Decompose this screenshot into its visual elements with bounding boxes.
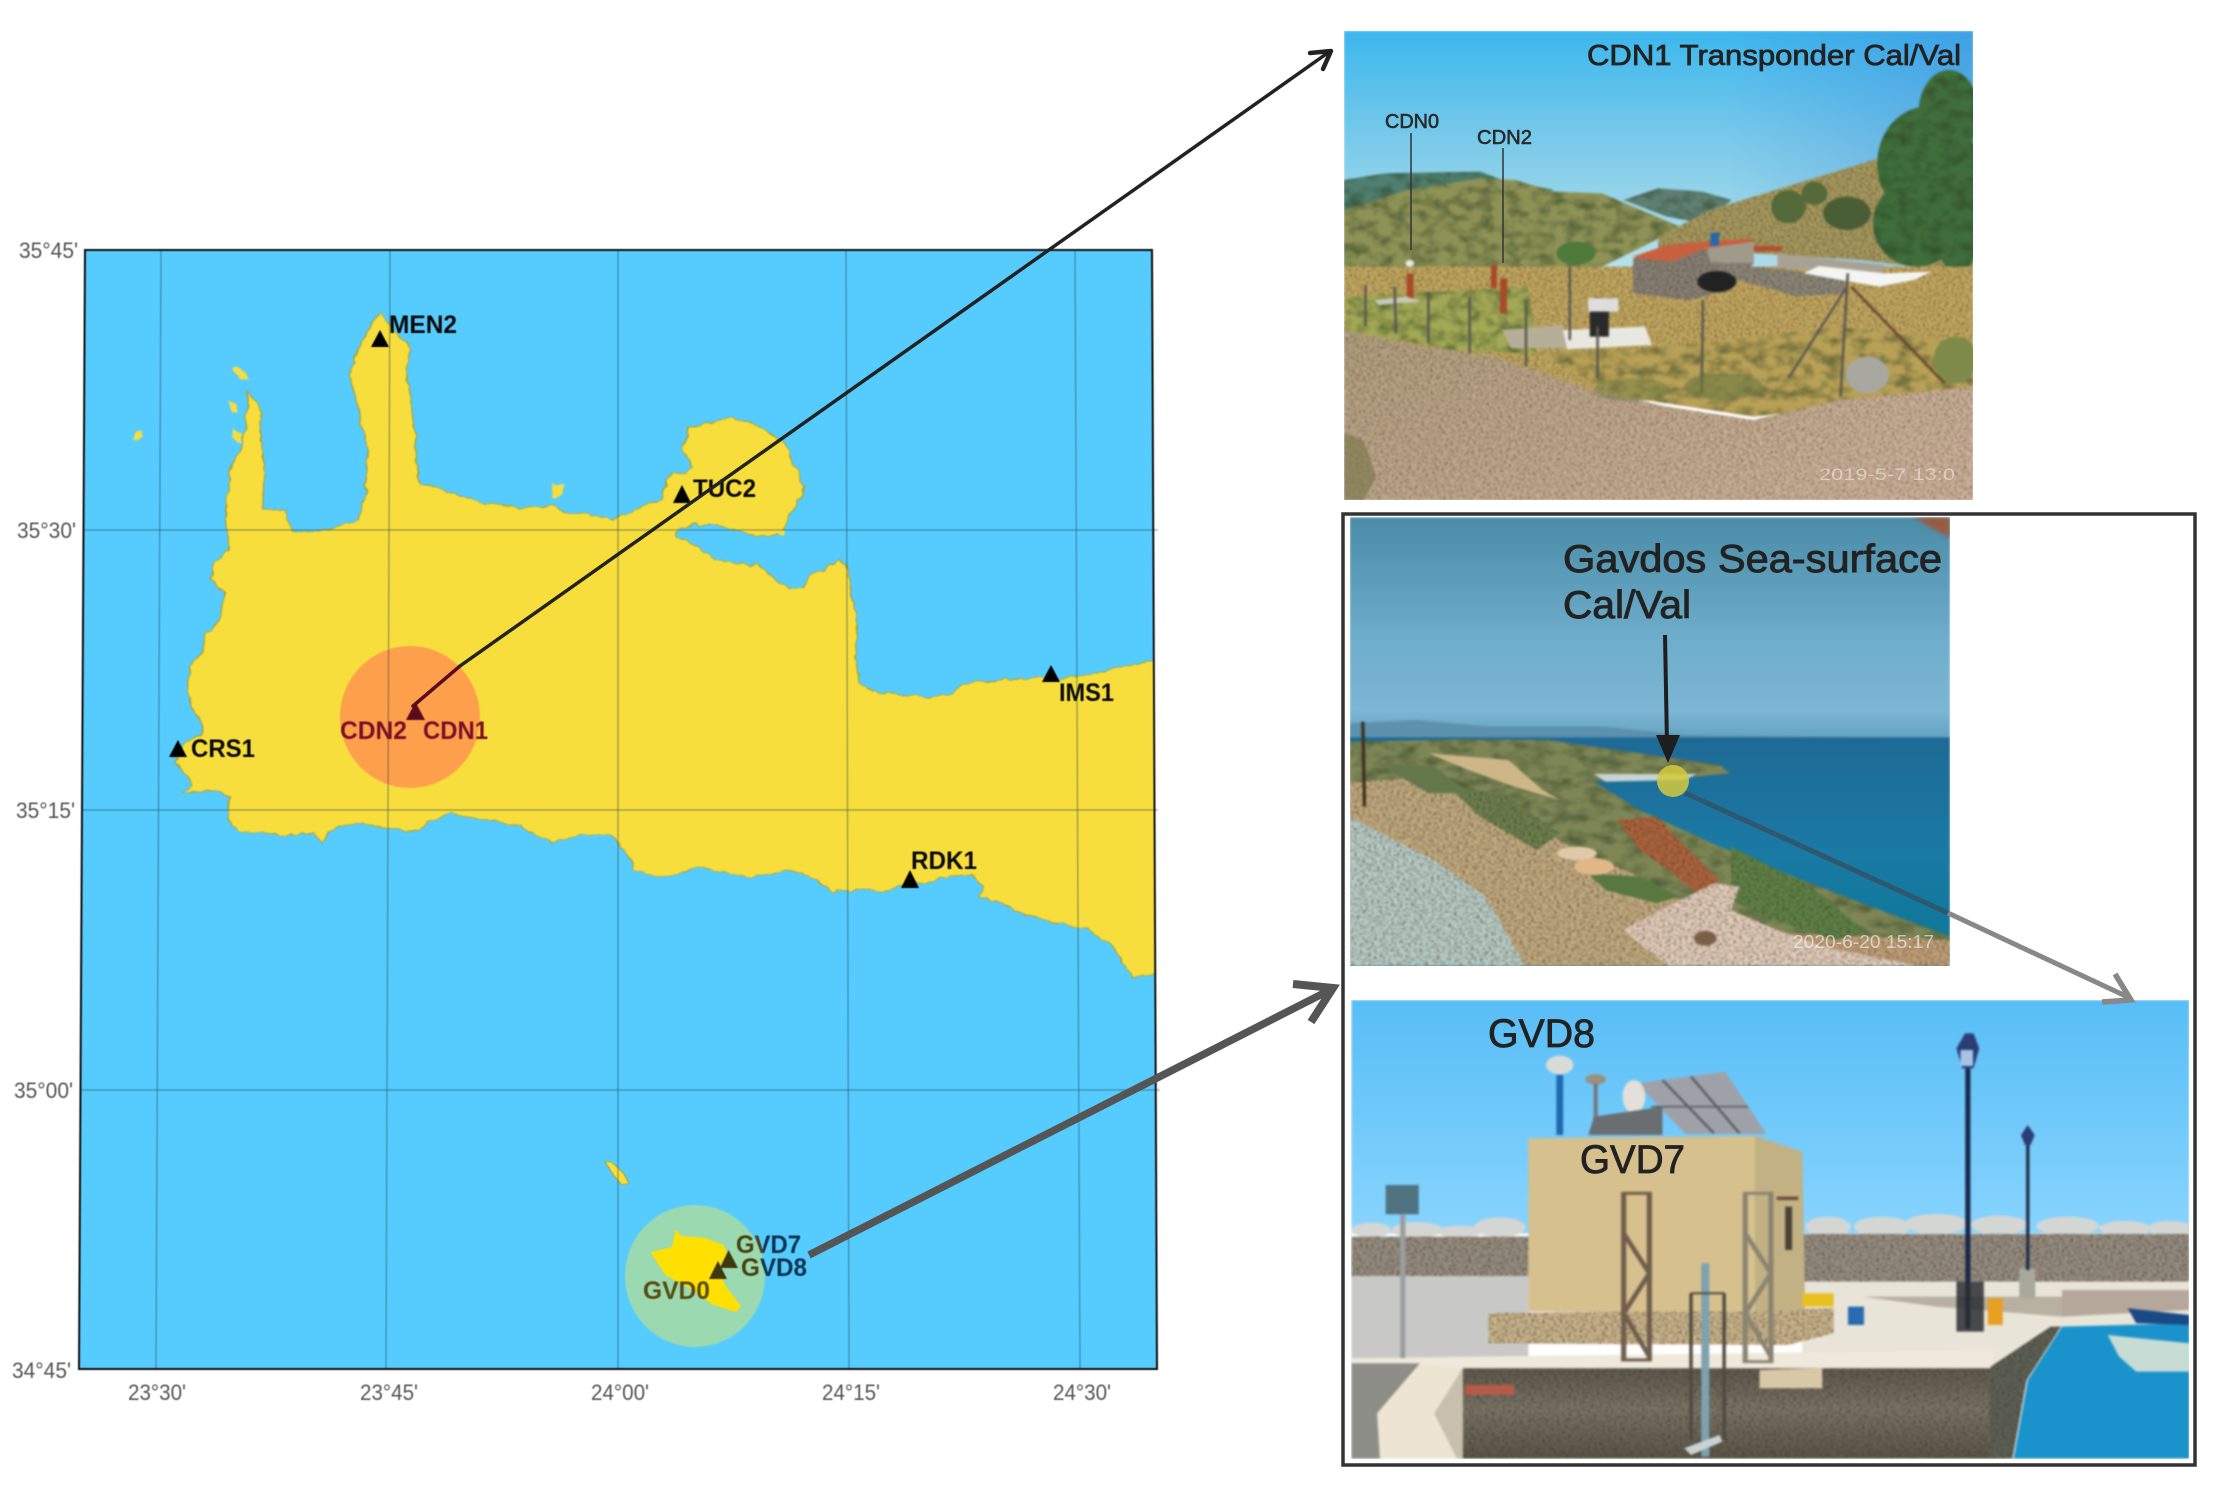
longitude axis labels: 23°30' (128, 1380, 186, 1405)
photo title: CDN1 Transponder Cal/Val (1587, 40, 1961, 72)
station labels: RDK1 (911, 847, 977, 875)
photo heading: Gavdos Sea-surface (1563, 538, 1942, 581)
map grid lines (80, 250, 1160, 1369)
map land: Gavdos island (651, 1229, 741, 1312)
longitude axis labels: 24°00' (591, 1380, 649, 1405)
longitude axis labels: 24°30' (1053, 1380, 1111, 1405)
station labels: CDN1 (423, 717, 488, 745)
station labels: GVD0 (643, 1277, 710, 1305)
station labels: IMS1 (1059, 679, 1114, 707)
photo timestamp: 2019-5-7 13:0 (1819, 465, 1955, 484)
latitude axis labels: 35°15' (16, 798, 75, 823)
latitude axis labels: 34°45' (12, 1358, 71, 1383)
panel: Gavdos sea-surface photo (1350, 517, 1950, 967)
latitude axis labels (12, 238, 78, 1383)
pointer lines to CDN0 and CDN2 (1411, 133, 1503, 263)
latitude axis labels: 35°45' (19, 238, 78, 263)
label: GVD8: GVD8 (1488, 1012, 1595, 1056)
station labels: GVD8 (741, 1254, 807, 1282)
latitude axis labels: 35°30' (17, 518, 76, 543)
label: GVD7: GVD7 (1580, 1138, 1685, 1182)
arrow: pointer to gauge site (1656, 635, 1680, 763)
arrow: gauge site to harbour photo (1685, 793, 2131, 1002)
photo heading (1564, 543, 1941, 619)
longitude axis labels: 23°45' (360, 1380, 418, 1405)
map land: western Crete (135, 313, 1224, 978)
station labels: GVD7 (736, 1231, 801, 1259)
map sea background (79, 250, 1157, 1369)
station labels (191, 311, 1114, 1305)
longitude axis labels: 24°15' (822, 1380, 880, 1405)
longitude axis labels (128, 1380, 1111, 1405)
panel: CDN1 transponder photo (1344, 31, 1984, 501)
arrow: CDN sites to transponder photo (413, 51, 1331, 706)
gauge site marker (1657, 765, 1689, 797)
station labels: CRS1 (191, 735, 255, 763)
highlight circle: CDN sites (340, 646, 480, 788)
latitude axis labels: 35°00' (14, 1078, 73, 1103)
panel: GVD7 and GVD8 harbour photo (1351, 1000, 2193, 1459)
station labels: CDN2 (340, 717, 407, 745)
station labels: TUC2 (693, 475, 756, 503)
station labels: MEN2 (389, 311, 457, 339)
panel: Gavdos outer frame (1343, 514, 2195, 1465)
arrow: Gavdos to harbour frame (809, 984, 1333, 1255)
panel: map of western Crete and Gavdos (12, 238, 1224, 1405)
photo scene: harbour station (1351, 1000, 2193, 1459)
highlight circle: Gavdos sites (625, 1205, 765, 1347)
photo scene: mountain site (1344, 31, 1984, 501)
label: CDN0: CDN0 (1385, 111, 1439, 133)
photo timestamp: 2020-6-20 15:17 (1793, 932, 1934, 952)
station markers (169, 330, 1060, 1279)
label: CDN2: CDN2 (1477, 127, 1532, 149)
photo heading: Cal/Val (1563, 584, 1691, 627)
photo scene: coastline (1350, 517, 1950, 967)
map land: Gavdopoula islet (605, 1161, 629, 1185)
map frame (79, 250, 1157, 1369)
